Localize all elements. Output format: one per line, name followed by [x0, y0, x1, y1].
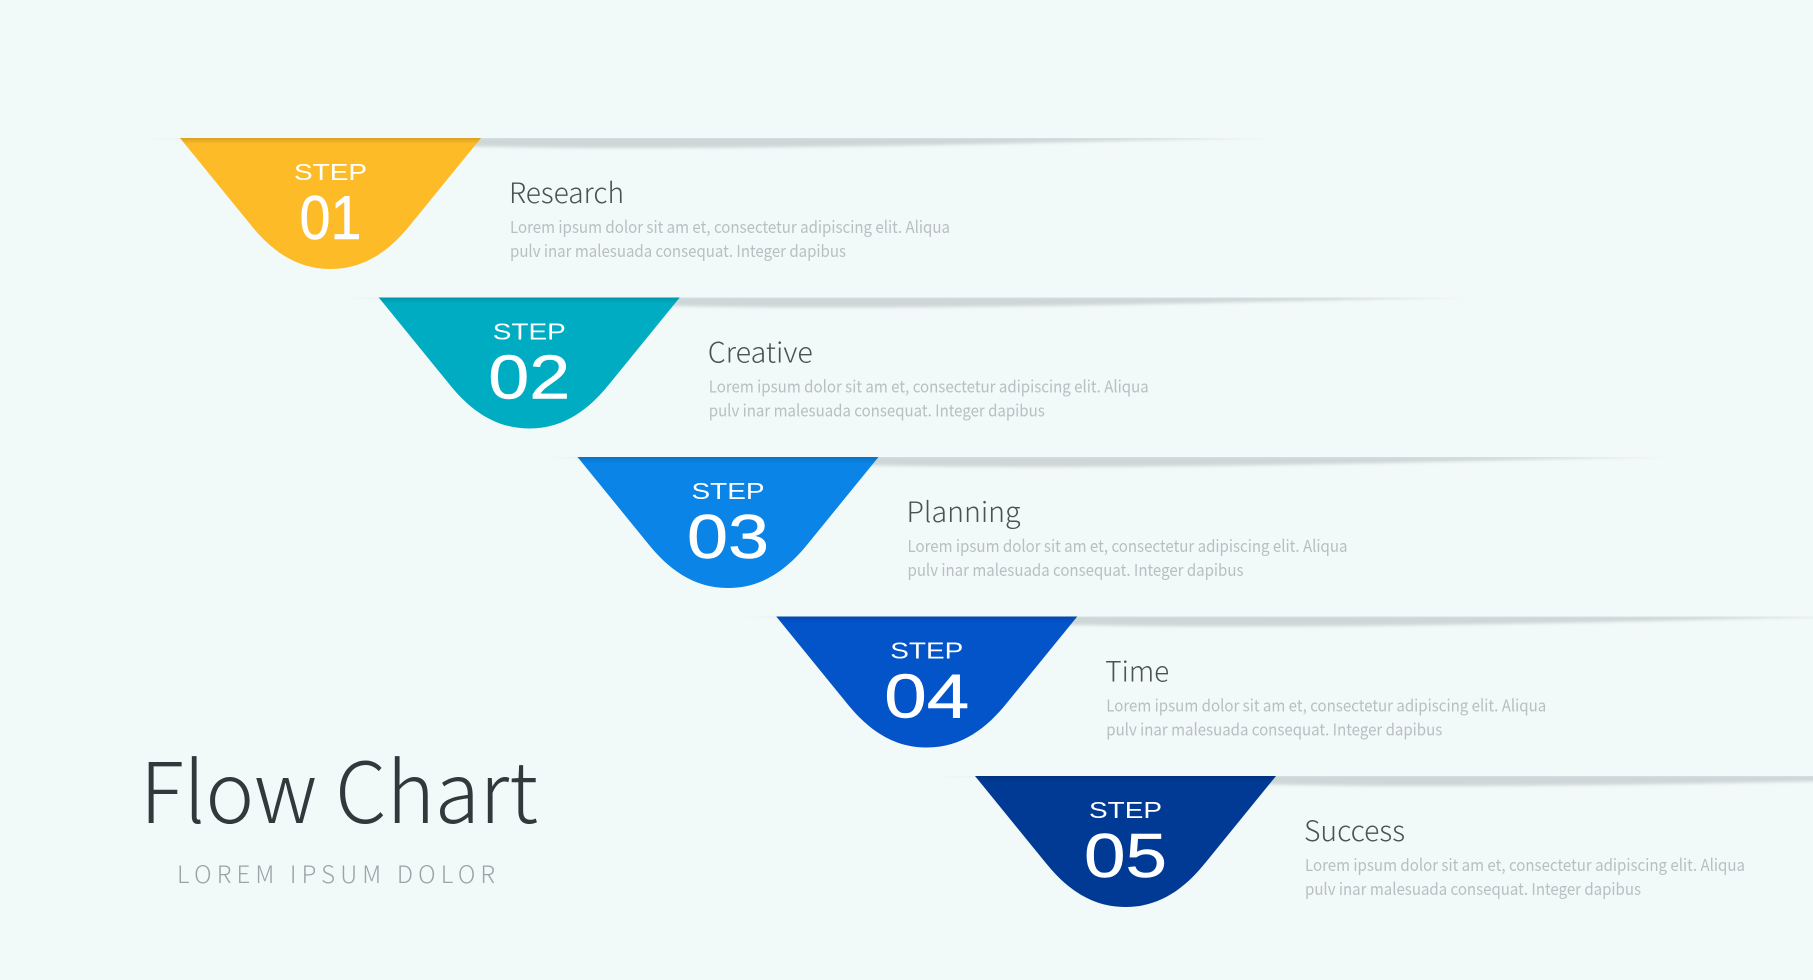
badge: step 05: [975, 776, 1276, 907]
fold shadow line: [474, 138, 1232, 149]
fold shadow line: [1268, 776, 1813, 787]
body text: planning: pulv inar malesuada consequat. Integer dapibus: [908, 557, 1244, 581]
body text: research: Lorem ipsum dolor sit am et, consectetur adipiscing elit. Aliqua: [510, 214, 950, 238]
step 4: time: [736, 616, 1813, 748]
number: 01: 01: [300, 184, 362, 253]
body text: time: Lorem ipsum dolor sit am et, consectetur adipiscing elit. Aliqua: [1106, 692, 1546, 716]
label: step 05: STEP: [1089, 797, 1162, 823]
step 1: research: [140, 137, 1275, 269]
body text: planning: [908, 533, 1348, 581]
label: step 04: STEP: [890, 638, 963, 664]
badge: step 03: [578, 457, 878, 588]
fold shadow line: [1070, 616, 1813, 628]
title: Flow Chart: [140, 727, 538, 848]
label: step 02: STEP: [493, 318, 566, 344]
heading: success: Success: [1304, 810, 1405, 850]
body text: time: pulv inar malesuada consequat. Integer dapibus: [1106, 716, 1442, 740]
subtitle: LOREM IPSUM DOLOR: [177, 855, 495, 890]
fold shadow line: [672, 298, 1432, 308]
number: 05: 05: [1084, 822, 1167, 891]
heading: research: Research: [509, 172, 624, 212]
label: step 01: STEP: [294, 159, 367, 185]
body text: research: pulv inar malesuada consequat. Integer dapibus: [510, 238, 846, 262]
body text: creative: pulv inar malesuada consequat. Integer dapibus: [709, 398, 1045, 422]
body text: time: [1106, 692, 1546, 740]
body text: creative: Lorem ipsum dolor sit am et, consectetur adipiscing elit. Aliqua: [709, 374, 1149, 398]
body text: creative: [709, 374, 1149, 422]
badge: step 01: [180, 138, 481, 269]
step 3: planning: [538, 456, 1672, 588]
label: step 03: STEP: [692, 478, 764, 504]
fold shadow line: [871, 457, 1627, 468]
heading: creative: Creative: [708, 332, 813, 372]
number: 02: 02: [488, 344, 570, 412]
number: 04: 04: [884, 662, 969, 732]
body text: research: [510, 214, 950, 262]
number: 03: 03: [687, 503, 769, 572]
badge: step 02: [379, 298, 680, 428]
badge: step 04: [776, 616, 1077, 748]
body text: success: Lorem ipsum dolor sit am et, consectetur adipiscing elit. Aliqua: [1305, 852, 1745, 876]
body text: planning: Lorem ipsum dolor sit am et, consectetur adipiscing elit. Aliqua: [908, 533, 1348, 557]
body text: success: pulv inar malesuada consequat. Integer dapibus: [1305, 876, 1641, 900]
heading: planning: Planning: [906, 491, 1020, 531]
heading: time: Time: [1105, 650, 1169, 690]
step 2: creative: [339, 296, 1474, 428]
body text: success: [1305, 852, 1745, 900]
step 5: success: [935, 775, 1813, 907]
